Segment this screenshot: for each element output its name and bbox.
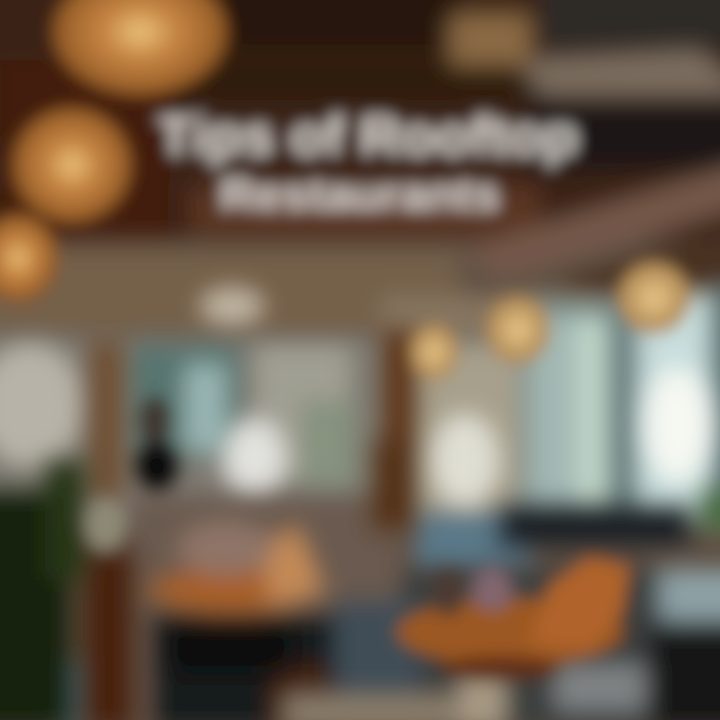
title (wording is a best guess; blurred in the reference) <box>158 104 578 220</box>
lamp: middle <box>12 107 132 223</box>
windows and walls <box>0 285 720 570</box>
lamp: right of window <box>618 262 690 334</box>
left table <box>150 520 325 672</box>
bright spots <box>0 288 712 506</box>
title (wording is a best guess; blurred in the reference): Tips of Rooftop <box>158 104 578 167</box>
title (wording is a best guess; blurred in the reference): Restaurants <box>220 168 500 220</box>
table objects <box>85 499 512 616</box>
pillars <box>85 330 416 720</box>
lamp: lower left <box>0 214 58 302</box>
lamp: centre <box>410 324 458 380</box>
right table and chair <box>396 556 630 680</box>
pendant lamps <box>0 0 690 380</box>
wall band <box>0 250 720 340</box>
plant <box>0 460 720 720</box>
person silhouette <box>133 396 181 492</box>
lower room <box>50 495 720 720</box>
lamp: top <box>52 0 228 96</box>
ceiling <box>0 0 720 310</box>
lamp: centre right <box>486 296 550 364</box>
